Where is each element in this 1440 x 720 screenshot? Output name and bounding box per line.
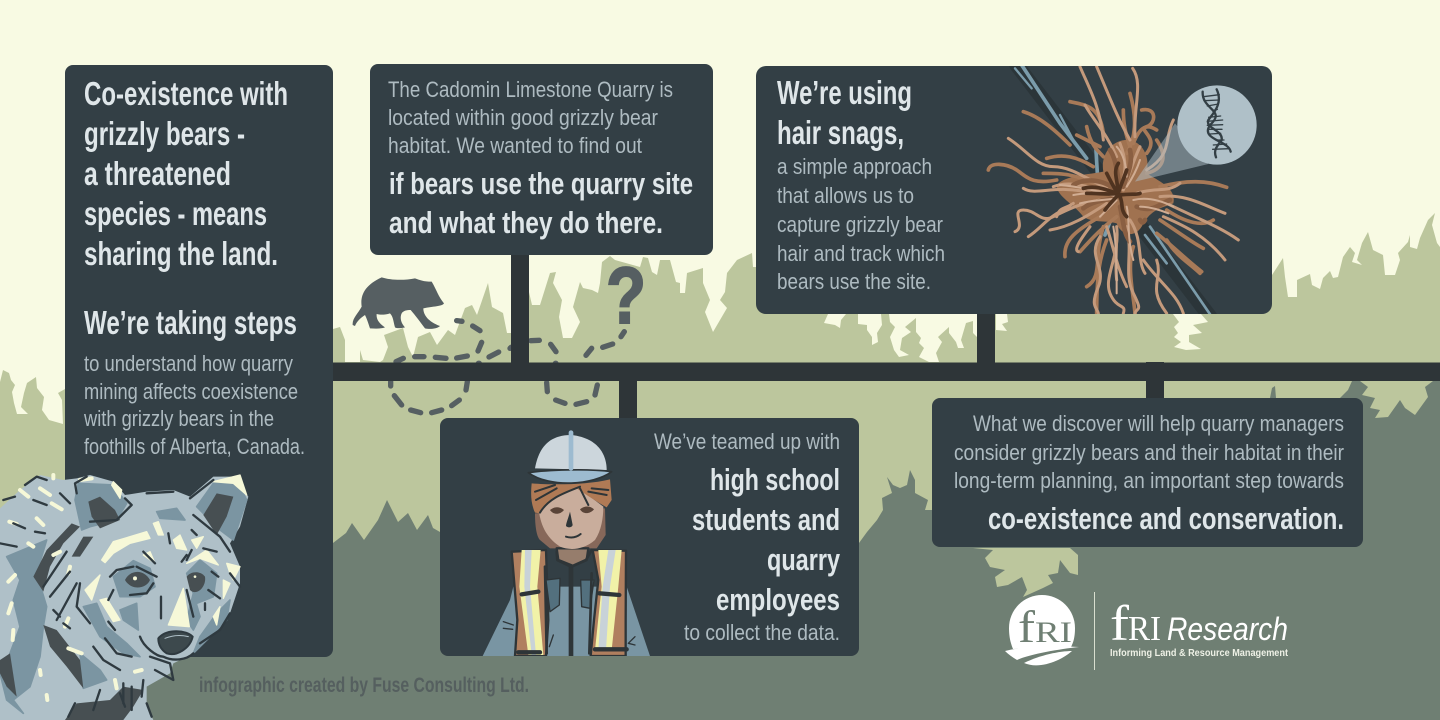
- bear highlights: [85, 475, 247, 627]
- logo: wordmark RI: RI: [1128, 609, 1161, 648]
- heading: co-existence: sharing the land.: [84, 235, 278, 272]
- text: quarry mining: to understand how quarry: [84, 351, 293, 376]
- logo: tagline: Informing Land & Resource Management: [1110, 648, 1289, 659]
- heading: co-existence: Co-existence with: [84, 75, 288, 112]
- illustration: grizzly bear portrait: [0, 475, 248, 720]
- heading: students and employees: students and: [692, 502, 840, 537]
- panel: what we discover: [932, 398, 1363, 547]
- logo: wordmark f: f: [1110, 595, 1129, 651]
- text: quarry mining: with grizzly bears in the: [83, 406, 274, 431]
- logo: circular emblem: [1005, 595, 1079, 665]
- heading: conservation: co-existence and conservation.: [988, 501, 1344, 536]
- text: hair snag description: bears use the site.: [777, 269, 931, 294]
- text: quarry location: located within good grizzly bear: [388, 105, 658, 130]
- text: hair snag description: capture grizzly bear: [777, 212, 943, 237]
- background: light tree shapes against dark layer: [973, 381, 1433, 597]
- logo: circular emblem: RI: [1035, 616, 1072, 649]
- heading: co-existence: grizzly bears -: [84, 115, 245, 152]
- bear nose: [158, 631, 193, 654]
- icon: hair tuft on barbed wire: [988, 65, 1257, 317]
- text: teamed up: We’ve teamed up with: [654, 429, 840, 454]
- panel: co-existence intro: [65, 65, 333, 657]
- icon: dna circle: [1177, 85, 1257, 165]
- text: quarry mining: [83, 351, 305, 459]
- text: hair snag description: a simple approach: [777, 154, 932, 179]
- credit line: infographic created by Fuse Consulting Ltd.: [199, 674, 529, 697]
- text: hair snag description: hair and track which: [777, 241, 945, 266]
- text: quarry location: [388, 77, 673, 158]
- panel: hair snags: [756, 65, 1272, 317]
- connector beams: [333, 255, 1440, 419]
- heading: co-existence: a threatened: [84, 155, 231, 192]
- logo: divider: [1094, 592, 1095, 670]
- heading: research question: [389, 166, 693, 240]
- heading: taking steps: We’re taking steps: [84, 304, 297, 341]
- heading: hair snags: [777, 74, 912, 151]
- heading: students and employees: employees: [716, 582, 840, 617]
- heading: research question: if bears use the quarry site: [389, 166, 693, 201]
- logo: circular emblem: f: [1018, 601, 1036, 652]
- text: hair snag description: [777, 154, 945, 294]
- heading: co-existence: species - means: [84, 195, 267, 232]
- text: discovery outcome: [954, 411, 1344, 493]
- text: hair snag description: that allows us to: [777, 183, 914, 208]
- panel: high school students: [440, 418, 859, 656]
- logo: research: Research: [1167, 611, 1288, 647]
- text: discovery outcome: long-term planning, an important step towards: [954, 468, 1344, 493]
- heading: hair snags: hair snags,: [777, 114, 904, 151]
- hair mass: [1057, 140, 1174, 234]
- text: discovery outcome: What we discover will help quarry managers: [973, 411, 1344, 436]
- heading: hair snags: We’re using: [777, 74, 912, 111]
- icon: magnifier cone: [1135, 123, 1208, 182]
- background: cream gaps under hair snag panel: [824, 314, 1208, 362]
- heading: students and employees: quarry: [767, 542, 841, 577]
- background: dark green treeline: [0, 381, 1440, 720]
- icon: dna helix: [1203, 89, 1231, 157]
- heading: students and employees: high school: [710, 462, 840, 497]
- dashed bear trail: [391, 321, 624, 413]
- panel: cadomin quarry: [370, 64, 713, 255]
- heading: students and employees: [692, 462, 841, 617]
- text: discovery outcome: consider grizzly bears and their habitat in their: [954, 440, 1344, 465]
- text: collect data: to collect the data.: [684, 620, 840, 645]
- heading: co-existence: [84, 75, 288, 272]
- text: quarry location: The Cadomin Limestone Quarry is: [388, 77, 673, 102]
- text: quarry mining: foothills of Alberta, Canada.: [84, 434, 305, 459]
- bear shading: [0, 483, 247, 713]
- icon: quarry worker: [483, 433, 650, 656]
- heading: research question: and what they do there.: [389, 205, 663, 240]
- logo: fRI Research: [1005, 592, 1289, 670]
- icon: walking bear silhouette: [353, 277, 444, 329]
- bear fur strokes: [0, 477, 240, 717]
- text: quarry mining: mining affects coexistence: [84, 379, 298, 404]
- background: light green treeline: [0, 213, 1440, 720]
- icon: question mark: ?: [606, 251, 646, 340]
- text: quarry location: habitat. We wanted to find out: [388, 133, 642, 158]
- bear dark patches: [0, 493, 233, 720]
